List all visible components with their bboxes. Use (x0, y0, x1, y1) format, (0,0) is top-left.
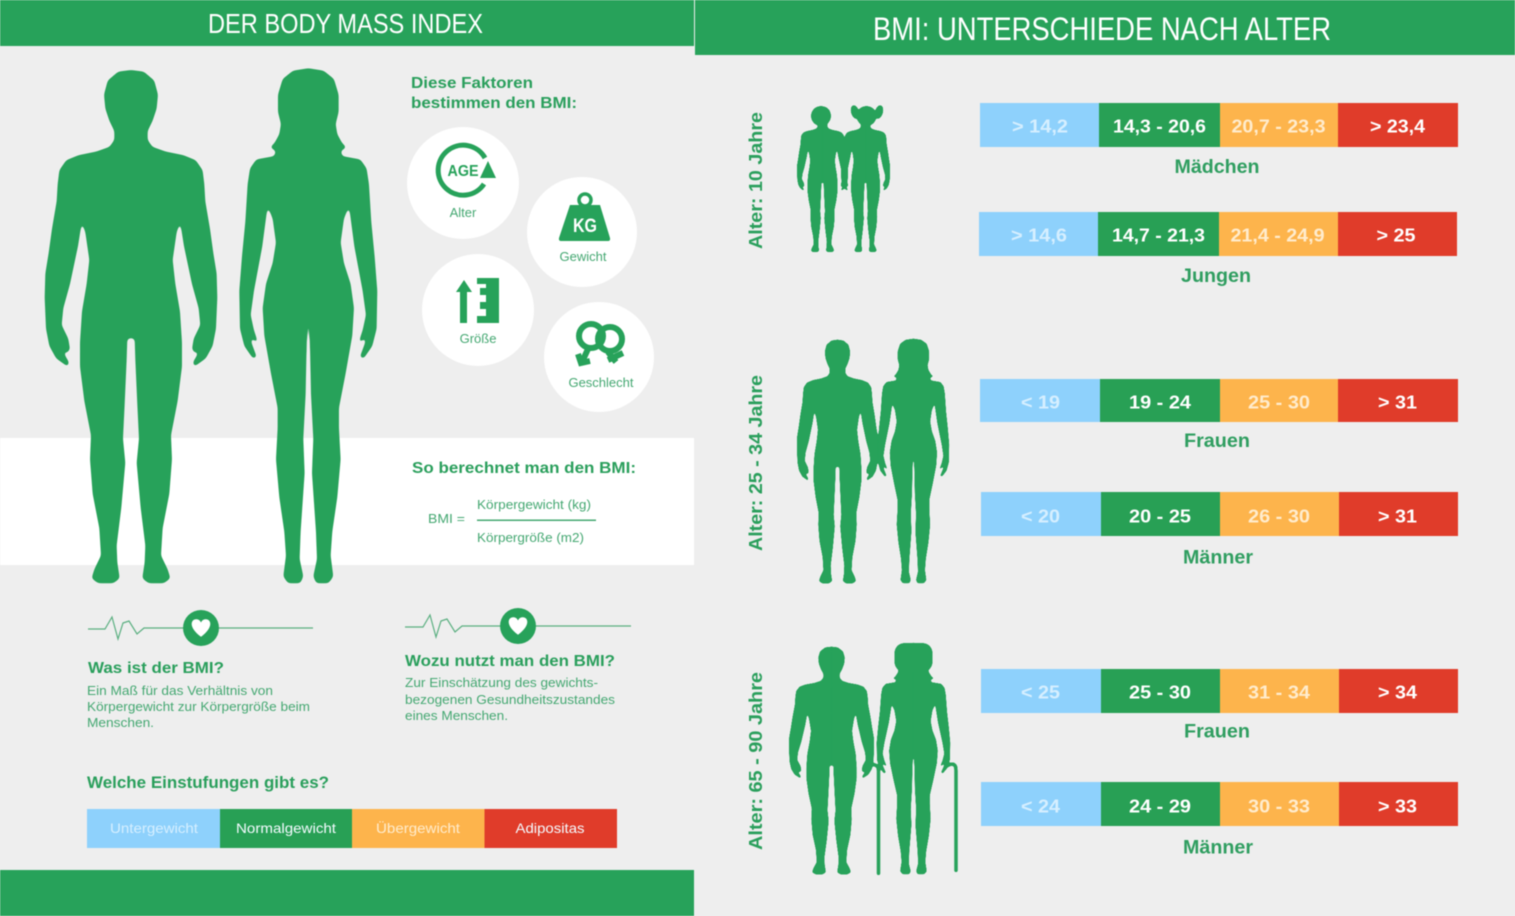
factor: weight (527, 177, 637, 287)
text block: what is BMI: Ein Maß für das Verhältnis von (87, 684, 273, 698)
bar row: men 25-34: < 20 (1021, 506, 1060, 526)
bar row: men 25-34: Männer (1183, 548, 1254, 568)
bar row: girls: 14,3 - 20,6 (1113, 116, 1206, 136)
age label: 10 years: Alter: 10 Jahre (746, 112, 766, 249)
factor: height (422, 254, 534, 366)
bar row: women 25-34: Frauen (1184, 431, 1250, 452)
bar row: men 25-34: > 31 (1378, 506, 1417, 526)
bar row: men 65-90: 30 - 33 (1248, 796, 1310, 816)
factor: gender: Geschlecht (568, 375, 634, 390)
panel: right column (695, 0, 1515, 875)
panel: left column (0, 0, 694, 916)
bar row: men 65-90: > 33 (1378, 796, 1417, 816)
text block: purpose of BMI: eines Menschen. (405, 709, 508, 723)
text block: what is BMI: Körpergewicht zur Körpergröße beim (87, 700, 310, 714)
factor: gender (544, 302, 654, 412)
bar row: men 25-34: 26 - 30 (1248, 506, 1310, 526)
bar row: boys: 14,7 - 21,3 (1112, 226, 1205, 246)
icon: heartbeat right (405, 608, 631, 644)
factor: age: Alter (450, 205, 477, 220)
bar row: men 65-90 (981, 782, 1458, 858)
heading: formula: So berechnet man den BMI: (412, 460, 636, 477)
heading: classifications: Welche Einstufungen gibt es? (87, 774, 329, 792)
factor: weight: KG (573, 216, 597, 237)
bar row: women 25-34: 25 - 30 (1248, 392, 1310, 412)
age label: 65-90 years: Alter: 65 - 90 Jahre (746, 672, 766, 850)
text block: purpose of BMI (405, 653, 615, 723)
factor: weight: Gewicht (560, 249, 607, 264)
text block: purpose of BMI: bezogenen Gesundheitszustandes (405, 693, 615, 707)
bar row: women 25-34 (980, 379, 1458, 452)
bar row: women 25-34: 19 - 24 (1129, 392, 1192, 412)
bar row: boys: Jungen (1181, 266, 1251, 287)
illustration: seniors with canes (789, 643, 956, 875)
bar row: women 65-90: 25 - 30 (1129, 682, 1191, 702)
factor: age (407, 127, 519, 239)
bar row: girls: 20,7 - 23,3 (1232, 116, 1326, 136)
bar row: girls: > 14,2 (1012, 116, 1068, 136)
bar row: women 25-34: < 19 (1021, 392, 1060, 412)
bar row: men 65-90: 24 - 29 (1129, 796, 1191, 816)
bar row: men 65-90: Männer (1183, 838, 1254, 858)
illustration: man silhouette (45, 71, 217, 583)
bar row: men 25-34: 20 - 25 (1129, 506, 1191, 526)
formula: Körpergröße (m2) (477, 530, 584, 545)
bar row: women 65-90: 31 - 34 (1248, 682, 1311, 702)
bar row: girls (980, 103, 1458, 178)
bar row: men 65-90: < 24 (1021, 796, 1061, 816)
heading: factors: bestimmen den BMI: (411, 95, 577, 112)
header bar: body mass index (0, 0, 694, 46)
legend: classifications: Übergewicht (376, 819, 460, 836)
heading: factors: Diese Faktoren (411, 75, 533, 92)
bar row: women 65-90: > 34 (1378, 682, 1418, 702)
formula (428, 497, 596, 545)
legend: classifications: Adipositas (516, 820, 584, 836)
bar row: girls: > 23,4 (1370, 116, 1425, 136)
bar row: women 65-90: Frauen (1184, 722, 1250, 742)
bar row: women 25-34: > 31 (1378, 392, 1417, 412)
illustration: adults (797, 339, 949, 583)
illustration: woman silhouette (240, 69, 377, 583)
factor: height: Größe (460, 331, 496, 346)
formula: Körpergewicht (kg) (477, 497, 591, 512)
bar row: boys (979, 212, 1457, 287)
legend: classifications (87, 809, 617, 848)
bar row: girls: Mädchen (1174, 157, 1260, 178)
text block: what is BMI (87, 660, 310, 730)
illustration: children (797, 104, 890, 252)
bar row: men 25-34 (981, 492, 1458, 568)
bar row: boys: > 14,6 (1011, 226, 1067, 246)
header bar: differences by age (695, 0, 1515, 55)
legend: classifications: Normalgewicht (236, 820, 336, 836)
icon: heartbeat left (88, 610, 313, 646)
text block: what is BMI: Menschen. (87, 716, 154, 730)
text block: purpose of BMI: Wozu nutzt man den BMI? (405, 653, 615, 670)
text block: what is BMI: Was ist der BMI? (88, 660, 224, 677)
white band (0, 438, 694, 565)
bar row: women 65-90: < 25 (1021, 682, 1060, 702)
bar row: women 65-90 (981, 669, 1458, 742)
age label: 25-34 years: Alter: 25 - 34 Jahre (746, 375, 766, 551)
formula: BMI = (428, 511, 465, 526)
text block: purpose of BMI: Zur Einschätzung des gewichts- (405, 676, 598, 690)
legend: classifications: Untergewicht (110, 820, 198, 836)
header bar: body mass index: DER BODY MASS INDEX (208, 8, 483, 39)
header bar: differences by age: BMI: UNTERSCHIEDE NACH ALTER (873, 11, 1331, 47)
bar row: boys: > 25 (1376, 226, 1416, 246)
bar row: boys: 21,4 - 24,9 (1230, 226, 1324, 246)
footer bar (0, 870, 694, 916)
factor: age: AGE (448, 163, 479, 180)
